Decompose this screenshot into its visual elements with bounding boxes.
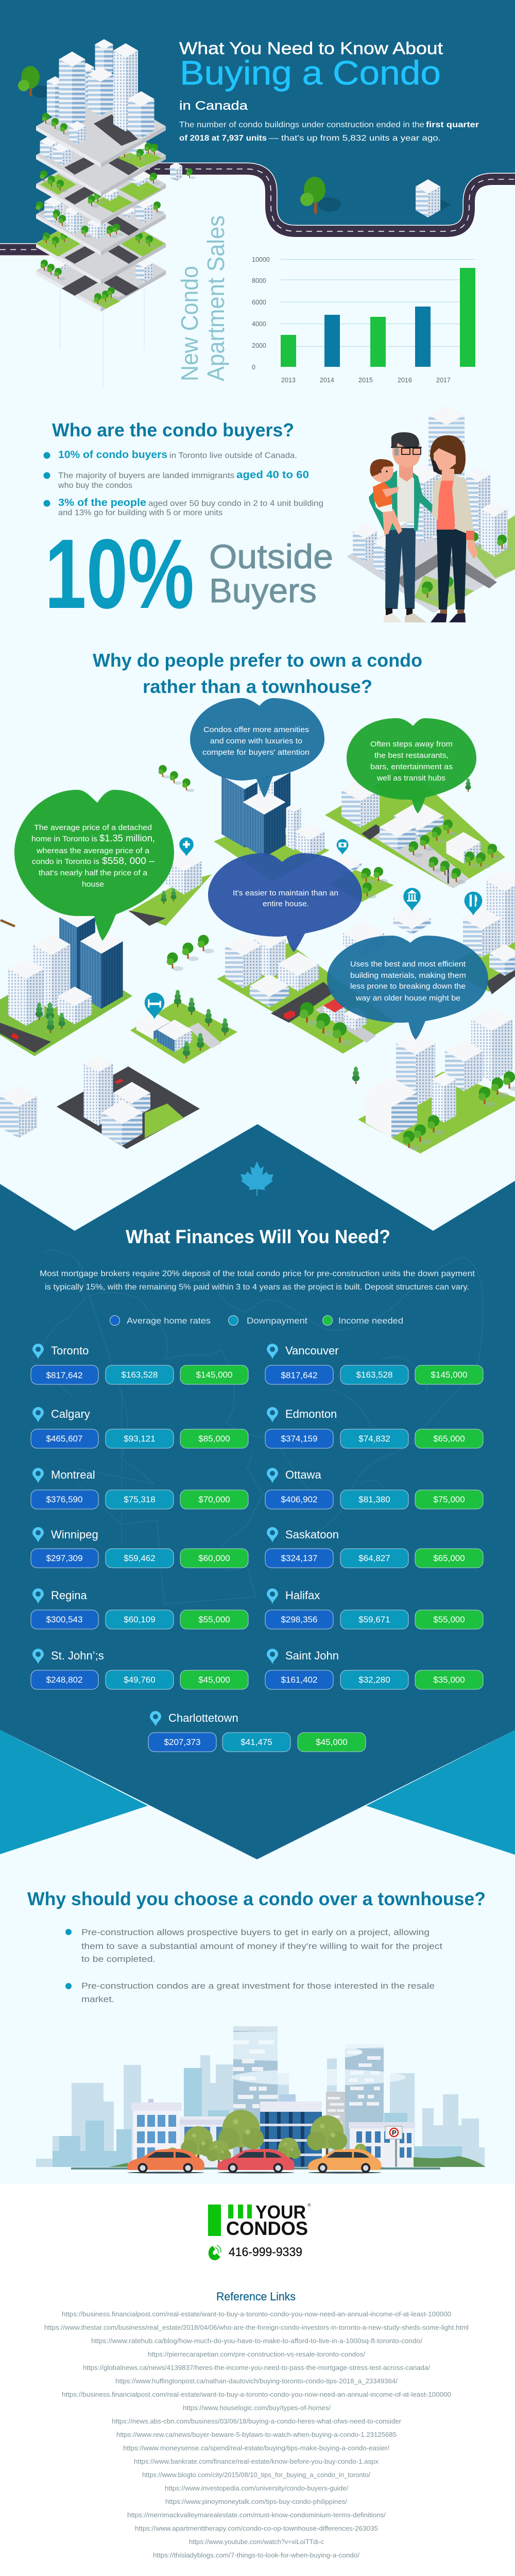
legend xyxy=(110,1316,403,1326)
bar chart xyxy=(252,256,475,384)
finance section background xyxy=(0,1124,515,1859)
city: Saskatoon: Saskatoon xyxy=(285,1528,339,1541)
city: Regina: $300,543 xyxy=(46,1615,82,1624)
city: Toronto xyxy=(31,1344,248,1384)
layer 4 xyxy=(36,177,166,256)
icon: hospital pin xyxy=(179,837,194,856)
layer 3 xyxy=(36,147,166,225)
city: Ottawa: $81,380 xyxy=(358,1495,390,1504)
no parking sign: P xyxy=(392,2129,397,2137)
skyline mid xyxy=(53,2068,462,2167)
city: Saint John: $32,280 xyxy=(358,1675,390,1685)
callout: maintenance: It's easier to maintain than an xyxy=(233,889,338,897)
finance paragraph: Most mortgage brokers require 20% deposit of the total condo price for pre-construction units the down payment xyxy=(40,1269,475,1278)
block: bank-side park xyxy=(329,854,394,902)
reference list: https://www.thestar.com/business/real_estate/2018/04/06/who-are-the-foreign-condo-investors-in-toronto-a-new-study-sheds-some-light.html xyxy=(44,2324,469,2331)
city: Edmonton: $374,159 xyxy=(281,1434,317,1444)
reference list: https://www.blogto.com/city/2015/08/10_tips_for_buying_a_condo_in_toronto/ xyxy=(142,2471,370,2479)
isometric tower stack xyxy=(36,39,166,312)
city: Winnipeg: $297,309 xyxy=(46,1553,82,1563)
decorative trees xyxy=(0,765,471,1084)
buyer bullet 2: aged 40 to 60 xyxy=(236,469,309,481)
reference list: https://www.rew.ca/news/buyer-beware-5-bylaws-to-watch-when-buying-a-condo-1.23125685 xyxy=(116,2431,397,2438)
hero tree right xyxy=(300,177,341,214)
city: Regina: Regina xyxy=(51,1589,87,1602)
city: Winnipeg: $60,000 xyxy=(198,1553,230,1563)
reference list: https://www.ratehub.ca/blog/how-much-do-you-have-to-make-to-afford-to-live-in-a-1000sq-ft-toronto-condo/ xyxy=(91,2337,422,2345)
city: Vancouver xyxy=(265,1344,483,1384)
chart title xyxy=(176,215,229,381)
city: Winnipeg: $59,462 xyxy=(124,1553,156,1563)
city: Calgary: $465,607 xyxy=(46,1434,82,1444)
reference list: https://www.apartmenttherapy.com/condo-co-op-townhouse-differences-263035 xyxy=(135,2524,378,2532)
callout: amenities xyxy=(190,698,324,798)
buyer bullet 3: 3% of the people xyxy=(58,497,146,509)
callout: maintenance: entire house. xyxy=(263,900,309,908)
callout: materials xyxy=(327,936,488,1040)
logo: YOUR xyxy=(255,2201,306,2223)
bars xyxy=(281,268,475,367)
buyer bullet 2: who buy the condos xyxy=(58,481,132,490)
reference list: https://www.youtube.com/watch?v=xiLoiTTdi-c xyxy=(189,2538,324,2546)
city: Vancouver: $145,000 xyxy=(431,1370,467,1380)
city: Montreal: $75,318 xyxy=(124,1495,156,1504)
city: Charlottetown xyxy=(148,1711,366,1752)
layer 6 xyxy=(36,233,166,312)
intro paragraph: The number of condo buildings under construction ended in the xyxy=(179,121,424,129)
reference list: https://pierrecarapetian.com/pre-construction-vs-resale-toronto-condos/ xyxy=(148,2350,365,2358)
block: left glass tower xyxy=(0,907,132,1056)
city: Regina: $55,000 xyxy=(198,1615,230,1624)
city: Edmonton: $65,000 xyxy=(433,1434,465,1444)
legend: Downpayment xyxy=(247,1316,307,1326)
city: Charlottetown: $207,373 xyxy=(164,1737,200,1747)
reference list: https://www.bankrate.com/finance/real-estate/know-before-you-buy-condo-1.aspx xyxy=(134,2458,379,2465)
hero building right xyxy=(416,179,451,217)
callout: materials: building materials, making them xyxy=(350,972,466,980)
callout: amenities: and come with luxuries to xyxy=(210,737,302,745)
reason bullet 1: Pre-construction allows prospective buyers to get in early on a project, allowing xyxy=(81,1927,430,1937)
city: Ottawa: Ottawa xyxy=(285,1468,321,1481)
y axis labels: 0 xyxy=(252,364,255,371)
x axis labels: 2015 xyxy=(358,377,373,384)
city: Edmonton: Edmonton xyxy=(285,1408,337,1420)
tall towers xyxy=(233,2026,384,2167)
city: Vancouver: Vancouver xyxy=(285,1344,339,1357)
city: Halifax: $59,671 xyxy=(358,1615,390,1624)
road xyxy=(0,169,515,249)
reference list: https://business.financialpost.com/real-estate/want-to-buy-a-toronto-condo-you-now-need-an-annual-income-of-at-least-100000 xyxy=(62,2310,451,2318)
city: Montreal: Montreal xyxy=(51,1468,95,1481)
city: Winnipeg: Winnipeg xyxy=(51,1528,98,1541)
city: St. John's: St. John’;s xyxy=(51,1649,104,1662)
hero tree left xyxy=(18,66,50,98)
heading: why prefer a condo xyxy=(93,650,422,697)
no parking sign xyxy=(385,2126,402,2167)
map of Canada watermark xyxy=(31,1250,483,1604)
x axis labels: 2016 xyxy=(398,377,412,384)
heading: why prefer a condo: rather than a townhouse? xyxy=(143,676,372,697)
intro paragraph xyxy=(179,121,479,143)
illustration: family xyxy=(369,432,478,622)
callout: amenities: Condos offer more amenities xyxy=(203,726,309,734)
logo xyxy=(208,2201,311,2239)
city: Saskatoon: $324,137 xyxy=(281,1553,317,1563)
block: bank building xyxy=(393,907,431,935)
city: Toronto: Toronto xyxy=(51,1344,89,1357)
reference list: https://merrimackvalleymarealestate.com/must-know-condominium-terms-definitions/ xyxy=(127,2511,386,2519)
reference list: https://www.pinoymoneytalk.com/tips-buy-condo-philippines/ xyxy=(165,2498,347,2505)
city: Ottawa: $406,902 xyxy=(281,1495,317,1504)
intro paragraph: of 2018 at 7,937 units xyxy=(179,134,267,143)
city: St. John's: $45,000 xyxy=(198,1675,230,1685)
reference list: https://globalnews.ca/news/4139837/heres-the-income-you-need-to-pass-the-mortgage-stress-test-across-canada/ xyxy=(83,2364,430,2371)
stat label: Outside xyxy=(209,537,333,575)
icon: bank pin xyxy=(403,888,421,911)
heading: why prefer a condo: Why do people prefer to own a condo xyxy=(93,650,422,671)
block: single building xyxy=(0,1085,37,1138)
buyer bullet 1 xyxy=(43,449,297,461)
y axis labels: 8000 xyxy=(252,277,266,284)
reference list: https://www.moneysense.ca/spend/real-estate/buying/tips-make-buying-a-condo-easier/ xyxy=(123,2444,389,2452)
city: Regina: $60,109 xyxy=(124,1615,156,1624)
buyer bullet 2: The majority of buyers are landed immigrants xyxy=(58,471,234,480)
support lines under tower xyxy=(60,289,144,387)
stat label: Buyers xyxy=(209,571,317,609)
city: Halifax: $55,000 xyxy=(433,1615,465,1624)
city: Charlottetown: Charlottetown xyxy=(168,1711,238,1724)
layer 5 xyxy=(36,206,166,284)
city: Halifax: Halifax xyxy=(285,1589,320,1602)
city: Calgary xyxy=(31,1407,248,1448)
callout: maintenance xyxy=(208,853,362,952)
stat label xyxy=(209,537,333,609)
layer 1 with towers xyxy=(36,39,166,167)
skyline light xyxy=(36,2055,485,2167)
reference list: https://www.huffingtonpost.ca/nathan-dautovich/buying-toronto-condo-tips-2018_a_23349364/ xyxy=(115,2377,398,2385)
city behind family xyxy=(347,404,515,613)
hills xyxy=(109,2156,486,2167)
y axis labels: 10000 xyxy=(252,256,270,263)
isometric city map xyxy=(0,765,515,1154)
callout: price comparison: that's nearly half the price of a xyxy=(39,869,148,877)
title line 3: in Canada xyxy=(179,99,248,113)
y axis labels: 2000 xyxy=(252,342,266,349)
hero dark background xyxy=(0,0,515,256)
teal side panels xyxy=(0,1730,515,1855)
city: Saskatoon xyxy=(265,1527,483,1568)
city: Edmonton xyxy=(265,1407,483,1448)
finance paragraph xyxy=(40,1269,475,1292)
right building xyxy=(349,2122,415,2167)
buyer bullet 2 xyxy=(43,469,309,490)
block: hospital xyxy=(128,851,212,926)
city: Charlottetown: $45,000 xyxy=(316,1737,348,1747)
baby xyxy=(370,459,402,534)
callout: price comparison: $1.35 million, xyxy=(99,833,155,843)
reference list: https://www.investopedia.com/university/condo-buyers-guide/ xyxy=(165,2484,348,2492)
city: Saskatoon: $64,827 xyxy=(358,1553,390,1563)
city: Montreal: $376,590 xyxy=(46,1495,82,1504)
reason bullet 1: to be completed. xyxy=(81,1954,156,1964)
icon: restaurant pin xyxy=(465,892,482,916)
reason bullet 2: market. xyxy=(81,1994,114,2004)
callout: price comparison: whereas the average price of a xyxy=(36,847,150,855)
callout: location: bars, entertainment as xyxy=(370,763,453,771)
reason bullet 1: them to save a substantial amount of money if they're willing to wait for the project xyxy=(81,1941,442,1951)
icon: maple leaf xyxy=(241,1161,273,1196)
city: Charlottetown: $41,475 xyxy=(241,1737,272,1747)
logo: CONDOS xyxy=(226,2218,308,2239)
small tree on road xyxy=(186,168,196,179)
ground line xyxy=(71,2167,440,2170)
city: Saint John: Saint John xyxy=(285,1649,339,1662)
city: Edmonton: $74,832 xyxy=(358,1434,390,1444)
block: bottom right towers xyxy=(358,1007,515,1154)
callout: materials: less prone to breaking down the xyxy=(350,982,466,991)
middle building xyxy=(180,2116,233,2167)
title line 2: Buying a Condo xyxy=(180,54,441,92)
icon: money pin xyxy=(337,839,348,855)
block: hotel xyxy=(130,990,237,1064)
x axis labels xyxy=(281,377,451,384)
man xyxy=(369,432,435,622)
heading: finances: What Finances Will You Need? xyxy=(126,1226,390,1247)
legend: Income needed xyxy=(338,1316,403,1326)
y axis labels: 4000 xyxy=(252,320,266,328)
legend: Average home rates xyxy=(127,1316,211,1326)
y axis labels xyxy=(252,256,270,371)
glass building xyxy=(260,2102,322,2167)
callout: location: the best restaurants, xyxy=(374,752,449,760)
callout: location xyxy=(347,718,476,814)
reference list: https://news.abs-cbn.com/business/03/06/18/buying-a-condo-heres-what-ofws-need-to-consider xyxy=(112,2417,402,2425)
city: Ottawa: $75,000 xyxy=(433,1495,465,1504)
reference list xyxy=(44,2310,469,2559)
callout: price comparison: $558, 000 – xyxy=(102,856,154,866)
buyer bullet 1: 10% of condo buyers xyxy=(58,449,167,461)
reference list: https://business.financialpost.com/real-estate/want-to-buy-a-toronto-condo-you-now-need-an-annual-income-of-at-least-100000 xyxy=(62,2391,451,2398)
x axis labels: 2014 xyxy=(320,377,334,384)
city: Saint John xyxy=(265,1649,483,1689)
finance paragraph: is typically 15%, with the remaining 5% paid within 3 to 4 years as the project is built. Deposit structures can vary. xyxy=(45,1283,469,1292)
city: Vancouver: $163,528 xyxy=(356,1370,392,1380)
title block xyxy=(179,39,443,113)
trees xyxy=(164,2110,368,2166)
city: Halifax: $298,356 xyxy=(281,1615,317,1624)
layer 2 xyxy=(36,118,166,196)
callout: price comparison: condo in Toronto is xyxy=(32,858,99,866)
buyer bullet 1: in Toronto live outside of Canada. xyxy=(169,451,297,460)
heading: reference links: Reference Links xyxy=(216,2290,296,2303)
x axis labels: 2017 xyxy=(436,377,451,384)
white building xyxy=(131,2099,182,2167)
intro paragraph: first quarter xyxy=(426,121,479,129)
city: Halifax xyxy=(265,1588,483,1629)
title line 1: What You Need to Know About xyxy=(179,39,443,58)
city: Montreal xyxy=(31,1468,248,1509)
small building on road xyxy=(170,162,182,181)
city: St. John's: $49,760 xyxy=(124,1675,156,1685)
illustration: street scene xyxy=(36,2018,486,2174)
callout: price comparison: home in Toronto is xyxy=(31,835,97,843)
buyer bullet 3: and 13% go for building with 5 or more units xyxy=(58,509,222,517)
intro paragraph: — that's up from 5,832 units a year ago. xyxy=(269,134,441,143)
city: Toronto: $817,642 xyxy=(46,1370,82,1380)
block: bottom crossroad xyxy=(57,1055,200,1149)
city: Calgary: Calgary xyxy=(51,1408,90,1420)
reference list: https://www.houselogic.com/buy/types-of-homes/ xyxy=(183,2404,331,2412)
phone: 416-999-9339 xyxy=(229,2245,302,2259)
big stat: 10% xyxy=(45,518,194,629)
buyer bullet 3 xyxy=(43,497,323,517)
city: Toronto: $163,528 xyxy=(122,1370,158,1380)
block: right towers xyxy=(443,870,515,994)
city: St. John's xyxy=(31,1649,248,1689)
block: central towers xyxy=(214,772,330,881)
icon: hotel pin xyxy=(145,993,164,1019)
logo: ® xyxy=(307,2202,311,2208)
callout: price comparison: house xyxy=(82,880,104,889)
callout: location: well as transit hubs xyxy=(376,774,445,783)
city: Calgary: $85,000 xyxy=(198,1434,230,1444)
city: Vancouver: $817,642 xyxy=(281,1370,317,1380)
chart title: New Condo xyxy=(176,266,203,381)
reason bullet 2 xyxy=(65,1981,435,2004)
block: restaurants xyxy=(325,768,505,888)
city: Winnipeg xyxy=(31,1527,248,1568)
clouds xyxy=(169,2018,422,2086)
heading: who are the condo buyers: Who are the condo buyers? xyxy=(52,419,294,440)
block: middle houses xyxy=(217,921,396,1054)
callout: location: Often steps away from xyxy=(370,740,453,749)
y axis labels: 6000 xyxy=(252,299,266,306)
callout: price comparison xyxy=(14,790,174,941)
chart title: Apartment Sales xyxy=(202,215,229,381)
city: Montreal: $70,000 xyxy=(198,1495,230,1504)
reason bullet 2: Pre-construction condos are a great investment for those interested in the resale xyxy=(81,1981,435,1991)
cars xyxy=(127,2149,381,2174)
city: Toronto: $145,000 xyxy=(196,1370,232,1380)
heading: why choose a condo: Why should you choose a condo over a townhouse? xyxy=(27,1888,486,1909)
city: Ottawa xyxy=(265,1468,483,1509)
city: Regina xyxy=(31,1588,248,1629)
callout: materials: way an older house might be xyxy=(355,994,460,1003)
reason bullet 1 xyxy=(65,1927,442,1964)
reference list: https://thisladyblogs.com/7-things-to-look-for-when-buying-a-condo/ xyxy=(153,2551,359,2559)
callout: materials: Uses the best and most efficient xyxy=(350,960,466,969)
woman xyxy=(430,435,478,622)
callout: price comparison: The average price of a detached xyxy=(34,824,152,832)
x axis labels: 2013 xyxy=(281,377,296,384)
gray building xyxy=(326,2092,345,2143)
city: Saint John: $35,000 xyxy=(433,1675,465,1685)
callout: amenities: compete for buyers' attention xyxy=(202,749,310,757)
city: St. John's: $248,802 xyxy=(46,1675,82,1685)
city: Saint John: $161,402 xyxy=(281,1675,317,1685)
city: Calgary: $93,121 xyxy=(124,1434,156,1444)
buyer bullet 3: aged over 50 buy condo in 2 to 4 unit building xyxy=(148,499,323,508)
city: Saskatoon: $65,000 xyxy=(433,1553,465,1563)
